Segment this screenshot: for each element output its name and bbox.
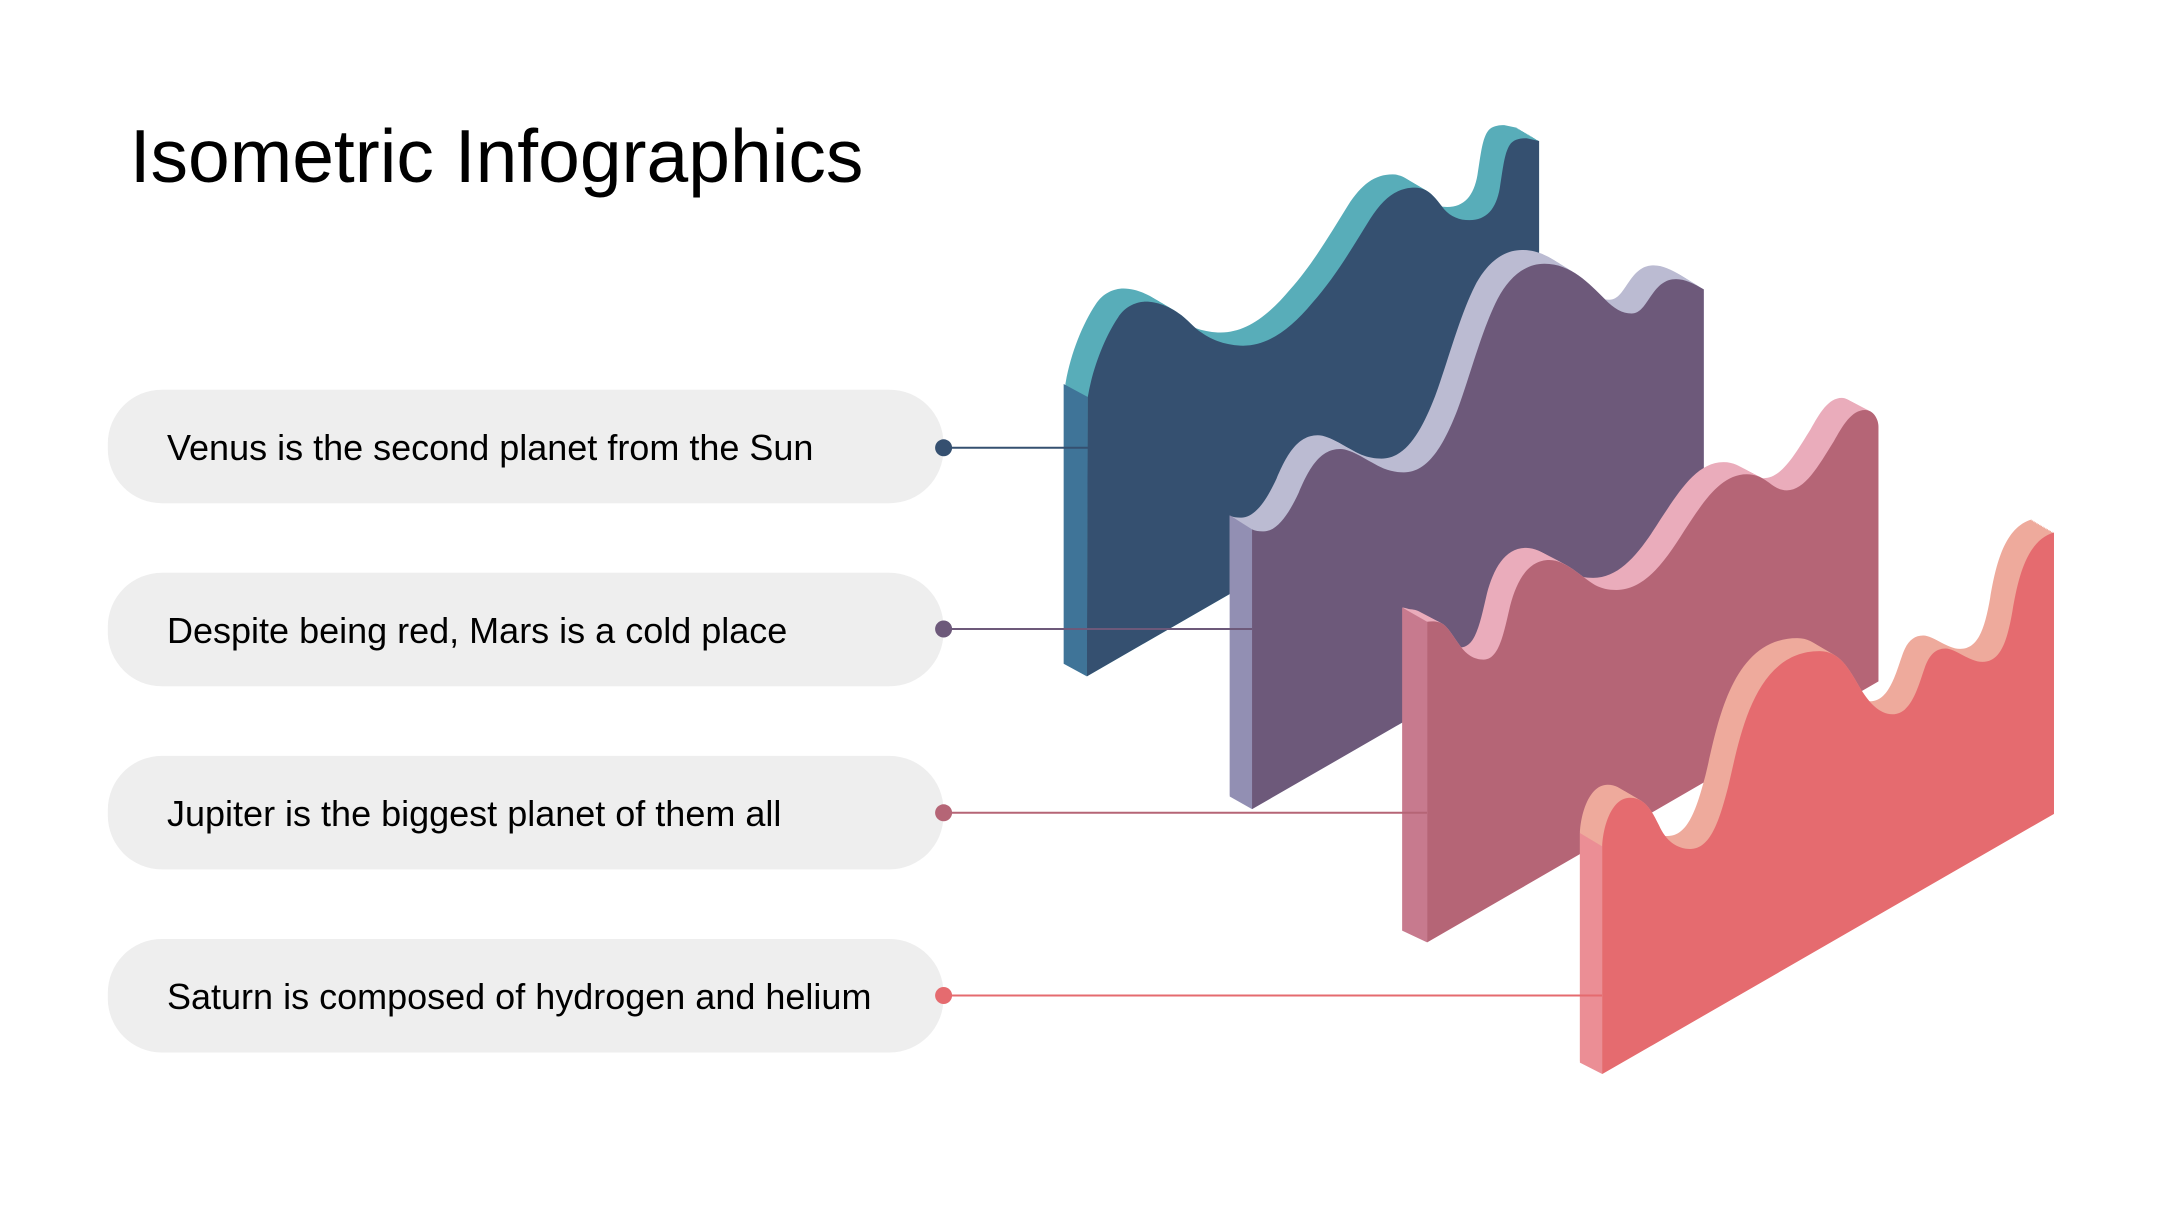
navy wave top band <box>1065 125 1539 676</box>
callout: Venus <box>108 390 944 503</box>
panel: rose isometric wave <box>1402 398 1878 942</box>
connector: Jupiter <box>935 804 1427 821</box>
panel: purple isometric wave <box>1230 250 1704 809</box>
purple wave top band <box>1230 250 1704 809</box>
callout: Saturn: Saturn is composed of hydrogen and helium <box>167 976 871 1017</box>
panel: coral isometric wave <box>1580 520 2054 1074</box>
callout: Jupiter <box>108 756 944 869</box>
connector: Saturn <box>935 987 1602 1004</box>
callout: Venus: Venus is the second planet from the Sun <box>167 427 813 468</box>
title: Isometric Infographics <box>130 114 863 198</box>
navy wave front face <box>1087 138 1539 676</box>
coral wave front face <box>1602 533 2054 1074</box>
rose wave top band <box>1402 398 1878 942</box>
callout: Jupiter: Jupiter is the biggest planet of them all <box>167 793 781 834</box>
rose wave side face <box>1402 607 1427 942</box>
coral wave side face <box>1580 833 1602 1074</box>
callout: Saturn <box>108 939 944 1052</box>
rose wave front face <box>1427 410 1878 942</box>
callout: Mars <box>108 573 944 686</box>
purple wave side face <box>1230 515 1252 809</box>
navy wave side face <box>1064 384 1088 676</box>
panel: navy isometric wave <box>1064 125 1539 676</box>
coral wave top band <box>1580 520 2054 1074</box>
connector: Mars <box>935 620 1252 638</box>
purple wave front face <box>1252 264 1704 809</box>
callout: Mars: Despite being red, Mars is a cold place <box>167 610 787 651</box>
connector: Venus <box>935 439 1088 456</box>
